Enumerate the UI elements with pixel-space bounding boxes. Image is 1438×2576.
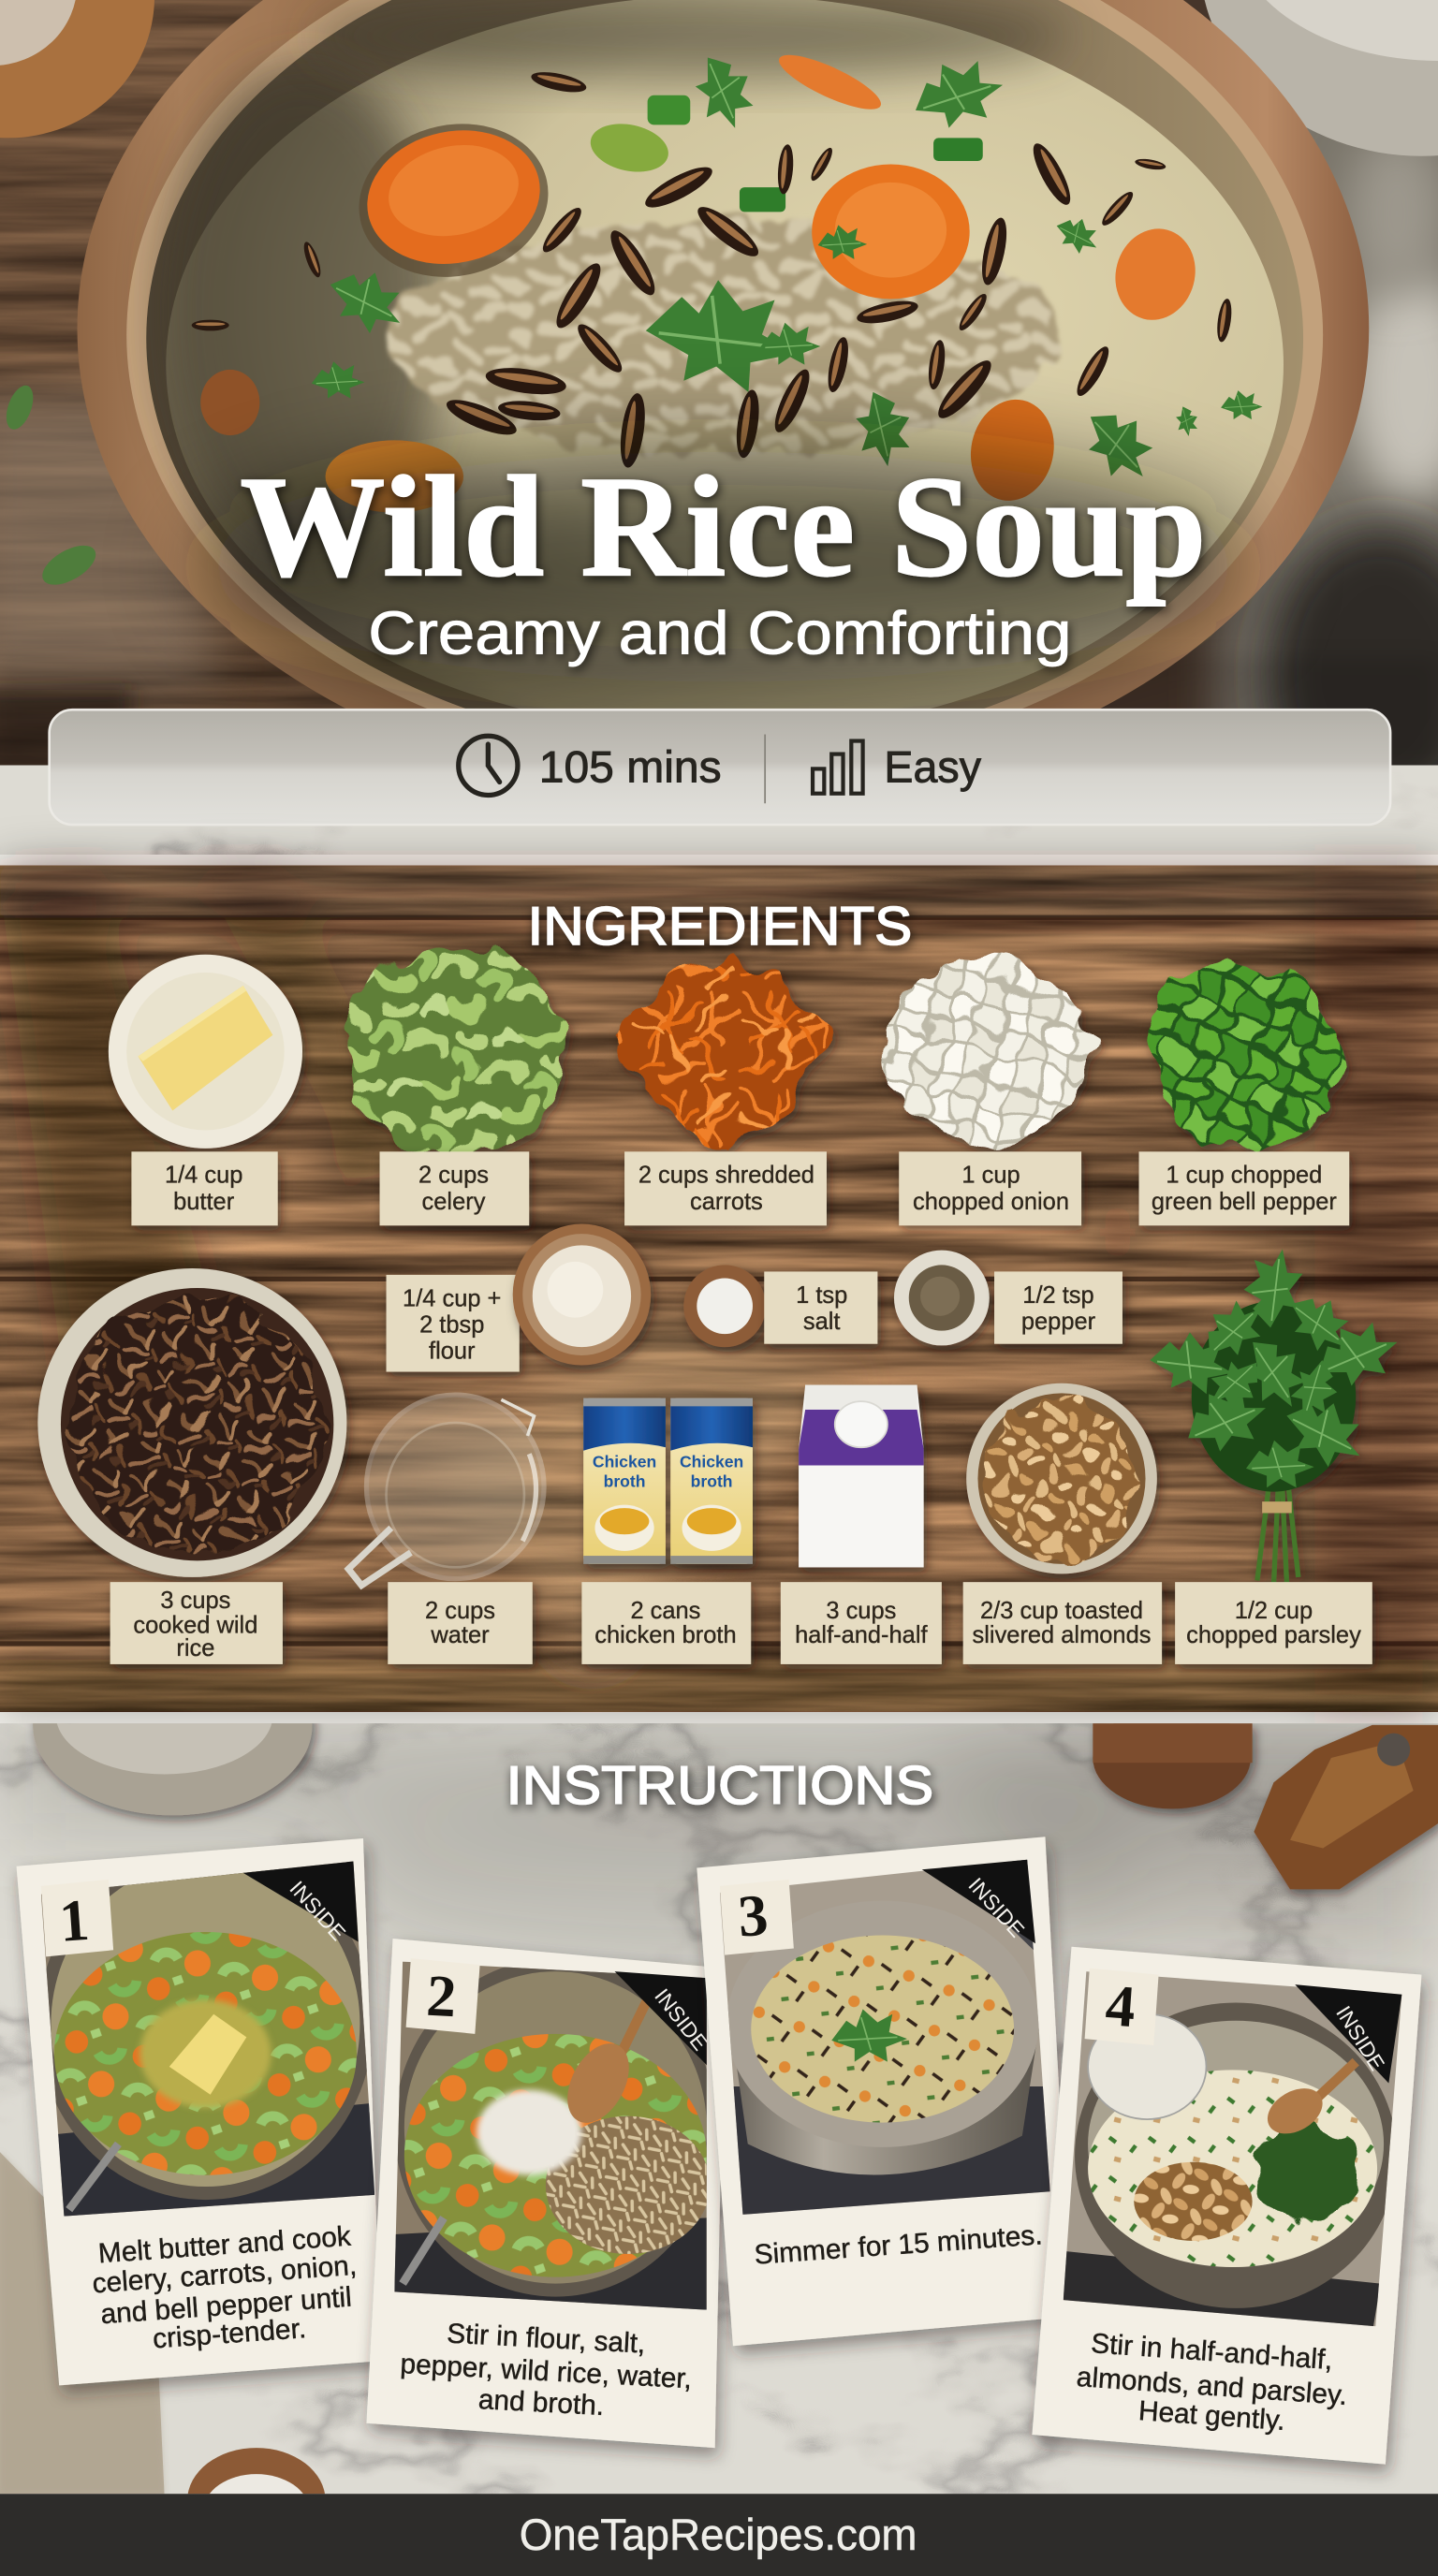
icon: terracotta side bowl xyxy=(0,0,154,138)
ingredient: almond bowl xyxy=(966,1383,1157,1573)
ingredient: salt bowl xyxy=(683,1265,766,1347)
label: almonds xyxy=(963,1582,1162,1664)
label: water: water xyxy=(430,1622,490,1648)
step 1 text: Melt butter and cook xyxy=(97,2221,352,2269)
label: parsley: 1/2 cup xyxy=(1235,1598,1313,1624)
label: wild rice: 3 cups xyxy=(160,1588,230,1614)
step 1 text xyxy=(92,2221,358,2354)
step 2 text: Stir in flour, salt, xyxy=(446,2319,646,2360)
stat: time: 105 mins xyxy=(539,742,722,792)
label: water: 2 cups xyxy=(425,1598,495,1624)
step 4 ribbon: INSIDE xyxy=(1331,2001,1389,2074)
panel: ingredients xyxy=(0,866,1438,1712)
icon: wooden pepper mill base xyxy=(1093,1707,1253,1808)
step 1 photo xyxy=(33,1848,374,2226)
step 2 text xyxy=(400,2319,693,2422)
step 3 text: Simmer for 15 minutes. xyxy=(754,2219,1044,2271)
label: pepper: 1/2 tsp xyxy=(1022,1282,1094,1309)
step 2 photo xyxy=(387,1955,716,2317)
step 2 text: pepper, wild rice, water, xyxy=(400,2349,693,2394)
label: half-and-half xyxy=(781,1582,942,1664)
ingredient: green pepper xyxy=(1147,959,1343,1150)
icon: linen cloth xyxy=(0,2152,165,2494)
icon: difficulty bars xyxy=(813,741,863,794)
icon: broth can left: Chicken xyxy=(593,1452,656,1471)
ingredient: flour bowl xyxy=(513,1224,651,1365)
label: celery: 2 cups xyxy=(418,1163,489,1189)
step 1 ribbon xyxy=(243,1862,359,1945)
label: carrots xyxy=(624,1151,827,1225)
ingredient: celery xyxy=(345,947,564,1152)
step 4 ribbon xyxy=(1295,1984,1401,2083)
step 3 number: 3 xyxy=(736,1882,770,1950)
marble strip below hero xyxy=(0,766,1438,855)
step 4 text: almonds, and parsley. xyxy=(1076,2362,1348,2411)
label: flour xyxy=(387,1275,520,1372)
step 1 number xyxy=(41,1880,113,1956)
label: wild rice: rice xyxy=(176,1635,214,1661)
step 1 text: crisp-tender. xyxy=(152,2313,307,2354)
label: bell pepper: green bell pepper xyxy=(1152,1189,1337,1215)
title: Wild Rice Soup xyxy=(240,446,1206,607)
footer: OneTapRecipes.com xyxy=(520,2510,917,2560)
label: broth: 2 cans xyxy=(630,1598,700,1624)
label: parsley xyxy=(1175,1582,1372,1664)
step 4 number xyxy=(1085,1969,1159,2045)
label: pepper xyxy=(994,1271,1123,1344)
label: broth xyxy=(581,1582,751,1664)
label: pepper: pepper xyxy=(1021,1309,1096,1335)
label: almonds: slivered almonds xyxy=(973,1622,1151,1648)
step 3 ribbon: INSIDE xyxy=(963,1873,1030,1942)
label: celery xyxy=(380,1151,529,1225)
soup: carrot slices xyxy=(200,45,1205,513)
step 4 number: 4 xyxy=(1104,1972,1137,2040)
step 1 ribbon: INSIDE xyxy=(285,1876,351,1945)
label: celery: celery xyxy=(422,1189,486,1215)
step card 3 xyxy=(697,1837,1072,2346)
step card 4 xyxy=(1032,1947,1421,2465)
label: onion: chopped onion xyxy=(913,1189,1069,1215)
label: butter: 1/4 cup xyxy=(165,1163,242,1189)
label: water xyxy=(388,1582,533,1664)
label: onion: 1 cup xyxy=(961,1163,1020,1189)
ingredient: chicken broth cans xyxy=(583,1398,753,1564)
icon: stray herbs on table xyxy=(6,386,95,585)
icon: ceramic bowl xyxy=(33,1634,313,1815)
ingredient: butter xyxy=(109,955,302,1149)
stats divider xyxy=(764,735,766,803)
soup bowl xyxy=(77,0,1369,709)
label: wild rice: cooked wild xyxy=(133,1613,257,1639)
step 1 number: 1 xyxy=(57,1887,91,1954)
step 1 text: and bell pepper until xyxy=(99,2282,353,2330)
step 2 ribbon: INSIDE xyxy=(650,1983,712,2055)
icon: wooden pepper grinder xyxy=(1254,1725,1438,1889)
ingredient: measuring cup with water xyxy=(348,1395,544,1586)
soup: green vegetables xyxy=(312,47,1263,492)
hero panel: soup photo xyxy=(0,0,1438,822)
label: butter xyxy=(131,1151,278,1225)
subtitle: Creamy and Comforting xyxy=(368,599,1072,667)
step 2 number xyxy=(406,1958,480,2034)
step card 1 xyxy=(17,1838,381,2385)
step 1 text: celery, carrots, onion, xyxy=(92,2250,358,2299)
soup: wild rice grains xyxy=(192,68,1234,469)
stat: difficulty: Easy xyxy=(884,742,981,792)
label: flour: flour xyxy=(429,1338,476,1364)
label: onion xyxy=(899,1151,1081,1225)
panel: instructions xyxy=(0,1634,1438,2553)
icon: broth can right: Chicken xyxy=(680,1452,743,1471)
stats bar xyxy=(50,710,1390,825)
label: carrots: 2 cups shredded xyxy=(638,1163,814,1189)
step 2 ribbon xyxy=(615,1971,712,2065)
heading: ingredients: INGREDIENTS xyxy=(527,897,912,957)
label: flour: 2 tbsp xyxy=(419,1311,484,1338)
step 3 number xyxy=(720,1880,794,1955)
step 2 number: 2 xyxy=(425,1963,458,2029)
label: half-and-half: half-and-half xyxy=(795,1622,928,1648)
ingredient: onion xyxy=(884,956,1093,1147)
step 4 text xyxy=(1076,2328,1348,2437)
step 3 photo xyxy=(715,1856,1060,2217)
step 3 ribbon xyxy=(922,1860,1035,1943)
label: bell pepper: 1 cup chopped xyxy=(1166,1163,1322,1189)
label: salt xyxy=(764,1271,877,1344)
step 2 text: and broth. xyxy=(477,2384,605,2422)
heading: instructions: INSTRUCTIONS xyxy=(506,1756,933,1816)
label: wild rice xyxy=(110,1582,283,1664)
step 4 photo xyxy=(1051,1963,1414,2333)
step card 2 xyxy=(366,1939,725,2448)
icon: salt bowl xyxy=(187,2448,326,2553)
label: flour: 1/4 cup + xyxy=(403,1285,501,1311)
icon: broth can right: broth xyxy=(691,1471,733,1490)
label: almonds: 2/3 cup toasted xyxy=(980,1598,1143,1624)
icon: clock xyxy=(459,736,518,795)
footer xyxy=(0,2494,1438,2576)
label: carrots: carrots xyxy=(690,1189,763,1215)
icon: white side bowl xyxy=(1199,0,1438,156)
label: salt: salt xyxy=(803,1309,841,1335)
label: half-and-half: 3 cups xyxy=(826,1598,896,1624)
icon: broth can left xyxy=(583,1398,666,1564)
label: broth: chicken broth xyxy=(594,1622,737,1648)
soup: rice mound xyxy=(387,218,1060,455)
ingredient: shredded carrots xyxy=(609,956,838,1153)
label: butter: butter xyxy=(173,1189,235,1215)
step 4 text: Heat gently. xyxy=(1137,2395,1286,2437)
label: parsley: chopped parsley xyxy=(1186,1622,1361,1648)
label: bell pepper xyxy=(1139,1151,1349,1225)
light haze over soup base xyxy=(0,657,1438,766)
icon: broth can left: broth xyxy=(604,1471,645,1490)
ingredient: wild rice bowl xyxy=(37,1268,346,1577)
step 4 text: Stir in half-and-half, xyxy=(1090,2328,1334,2376)
icon: broth can right xyxy=(670,1398,753,1564)
label: salt: 1 tsp xyxy=(796,1282,847,1309)
ingredient: parsley bunch xyxy=(1146,1244,1406,1586)
ingredient: half-and-half carton xyxy=(799,1385,924,1567)
title backdrop shadow xyxy=(198,452,1249,681)
ingredient: pepper bowl xyxy=(894,1251,990,1345)
